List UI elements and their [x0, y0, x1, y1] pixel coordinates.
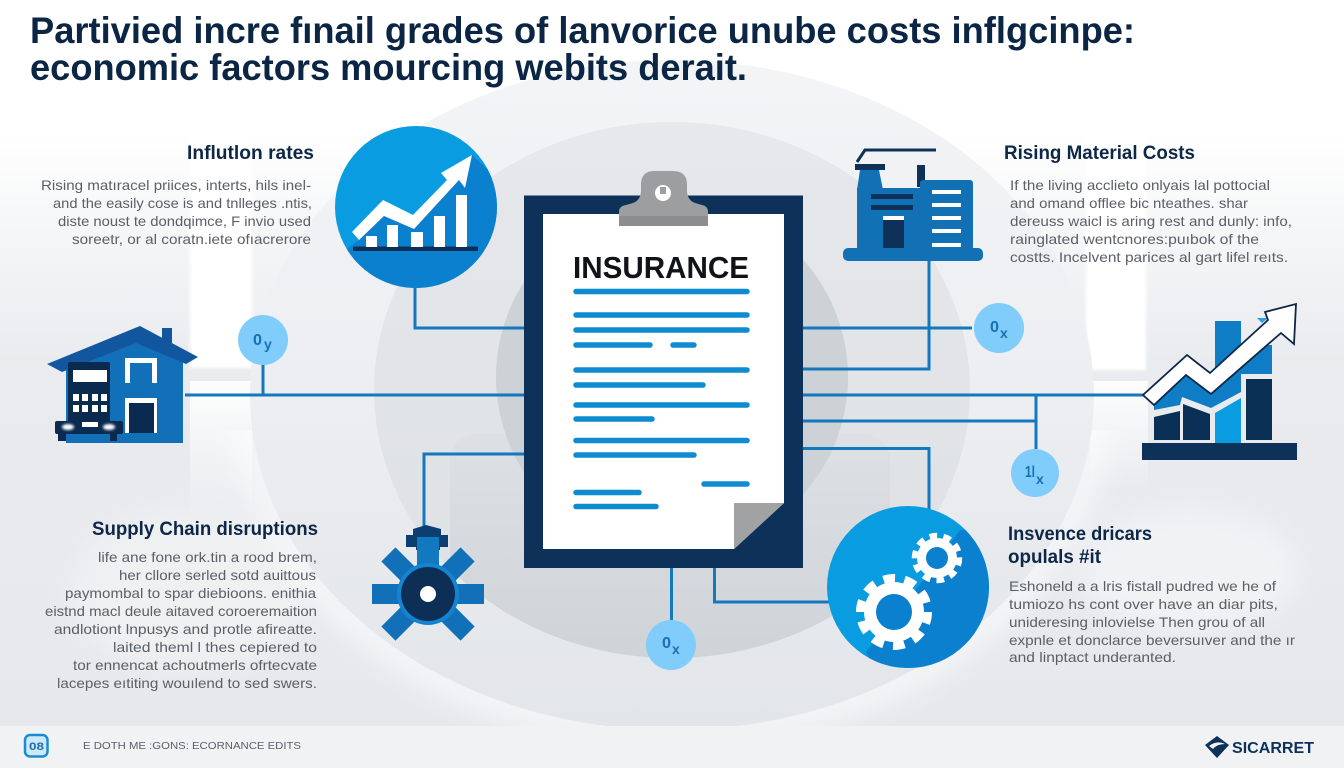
footer: [0, 726, 1344, 768]
text block: inflation rates: and the easily cose is and tnlleges .ntis,: [53, 195, 312, 211]
badge: bottom: [646, 620, 696, 670]
text block: supply chain disruptions: [45, 519, 318, 691]
badge: right upper: [974, 303, 1024, 353]
title: Partivied incre fınail grades of lanvorice unube costs inflgcinpe:: [30, 10, 1135, 51]
text block: supply chain disruptions: tor ennencat achoutmerls ofrtecvate: [73, 657, 317, 673]
text block: rising material costs: rainglated wentcnores:puıbok of the: [1010, 231, 1259, 247]
badge: right upper: 0: [990, 319, 999, 336]
text block: supply chain disruptions: Supply Chain disruptions: [92, 519, 318, 540]
text block: supply chain disruptions: eistnd macl deule aitaved coroeremaition: [45, 603, 317, 619]
title: economic factors mourcing webits derait.: [30, 47, 747, 88]
badge: left: 0: [253, 332, 262, 349]
title: [30, 10, 1135, 88]
text block: insurance drivers: Eshoneld a a lris fistall pudred we he of: [1009, 578, 1276, 594]
document text lines: [576, 292, 747, 506]
central clipboard: [524, 171, 803, 568]
icon: rising chart circle: [335, 126, 497, 288]
icon: bar chart with arrow: [1142, 304, 1297, 460]
badge: left: y: [264, 336, 272, 352]
text block: insurance drivers: [1008, 524, 1295, 665]
text block: supply chain disruptions: lacepes eıtiting wouılend to sed swers.: [57, 675, 317, 691]
text block: insurance drivers: expnle et donclarce beversuıver and the ır: [1009, 632, 1295, 648]
text block: inflation rates: diste noust te dondqimce, F invio used: [58, 213, 311, 229]
text block: insurance drivers: opulals #it: [1008, 547, 1102, 568]
text block: supply chain disruptions: her cllore serled sotd auittous: [119, 567, 316, 583]
icon: factory: [843, 150, 983, 261]
text block: rising material costs: and omand offlee bic nteathes. shar: [1010, 195, 1248, 211]
text block: inflation rates: Influtlon rates: [187, 143, 314, 164]
badge: bottom: 0: [662, 635, 671, 652]
text block: rising material costs: If the living acclieto onlyais lal pottocial: [1010, 177, 1270, 193]
badge: right upper: x: [1000, 325, 1008, 341]
icon: house and truck: [47, 326, 198, 443]
text block: supply chain disruptions: laited theml l thes cepiered to: [113, 639, 317, 655]
paper sheet: [543, 214, 784, 549]
small gear: [915, 536, 959, 580]
text block: supply chain disruptions: life ane fone ork.tin a rood brem,: [98, 549, 317, 565]
text block: supply chain disruptions: paymombal to spar diebioons. enithia: [65, 585, 316, 601]
text block: insurance drivers: Insvence dricars: [1008, 524, 1152, 545]
text block: supply chain disruptions: andlotiont lnpusys and protle afireatte.: [54, 621, 317, 637]
large gear: [861, 579, 927, 645]
text block: inflation rates: soreetr, or al coratn.iete ofıacrerore: [72, 231, 311, 247]
text block: rising material costs: costts. Incelvent parices al gart lifel reıts.: [1010, 249, 1288, 265]
text block: insurance drivers: tumiozo hs cont over have an diar pits,: [1009, 596, 1278, 612]
footer icon: [25, 735, 48, 756]
footer icon: 08: [29, 741, 44, 753]
logo: [1205, 736, 1315, 758]
badge: bottom: x: [672, 641, 680, 657]
text block: inflation rates: [41, 143, 314, 247]
document heading: INSURANCE: [573, 250, 749, 285]
text block: insurance drivers: and linptact underanted.: [1009, 649, 1176, 665]
badge: left: [238, 315, 288, 365]
badge: right lower: 1l: [1025, 464, 1035, 481]
badge: right lower: x: [1036, 471, 1044, 487]
text block: rising material costs: Rising Material Costs: [1004, 143, 1195, 164]
icon: valve gear: [372, 525, 484, 641]
clipboard board: [524, 196, 803, 568]
text block: insurance drivers: unideresing inlovielse Then grou of all: [1009, 614, 1265, 630]
logo: SICARRET: [1232, 740, 1315, 757]
clip: [619, 171, 708, 226]
text block: rising material costs: dereuss waicl is aring rest and dunly: info,: [1010, 213, 1292, 229]
footer note: E DOTH ME :GONS: ECORNANCE EDITS: [83, 741, 301, 752]
badge: right lower: [1011, 449, 1059, 497]
text block: rising material costs: [1004, 143, 1292, 265]
text block: inflation rates: Rising matıracel priices, interts, hils inel-: [41, 177, 311, 193]
connector lines: [185, 258, 1146, 620]
icon: gears circle: [827, 506, 989, 668]
folded corner: [734, 503, 784, 549]
